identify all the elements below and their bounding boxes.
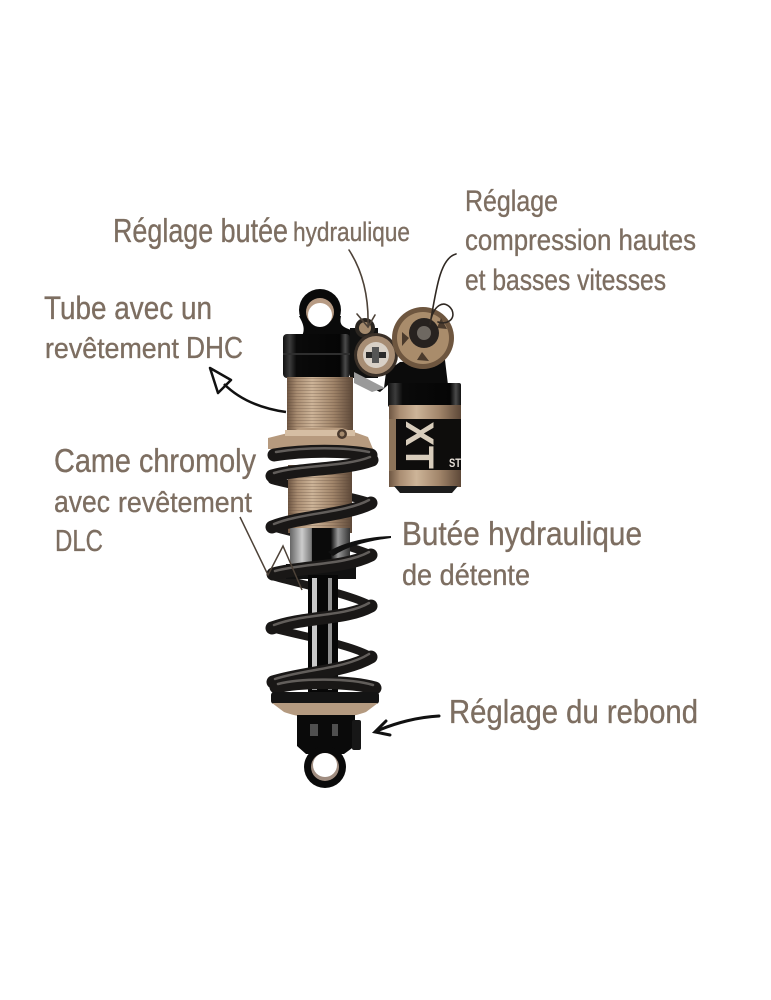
label: chromoly cam	[54, 442, 256, 558]
hose connector	[354, 360, 448, 392]
arrow: rebound adjust	[375, 716, 439, 735]
arrow: rebound bump stop	[328, 536, 391, 556]
label: chromoly cam: avec	[54, 484, 110, 519]
label: rebound bump stop	[402, 515, 642, 592]
top eyelet	[299, 289, 356, 345]
arrow: chromoly cam	[240, 517, 302, 590]
reservoir	[388, 383, 462, 493]
arrow: hydraulic bump stop adjust	[349, 250, 375, 327]
bronze threaded tube	[287, 377, 353, 533]
shaft	[308, 575, 338, 697]
bottom eyelet and rebound knob	[297, 715, 361, 788]
front spring coils	[272, 448, 375, 688]
label: DHC tube: DHC	[186, 330, 243, 365]
label: rebound bump stop: Butée hydraulique	[402, 515, 642, 552]
bottom spring plate	[271, 692, 379, 718]
label: rebound bump stop: de détente	[402, 559, 530, 592]
compression knob	[392, 307, 454, 369]
collar	[268, 428, 373, 449]
label: DHC tube: Tube avec un	[44, 290, 212, 326]
label: compression adjust	[465, 185, 696, 297]
label: DHC tube: revêtement	[45, 333, 179, 365]
label: bump stop adjust: hydraulique	[293, 217, 410, 247]
label: chromoly cam: Came chromoly	[54, 442, 256, 479]
reservoir logo: XT	[397, 421, 441, 469]
large hydraulic knob	[354, 333, 398, 377]
arrow: DHC tube	[210, 368, 286, 412]
arrow: compression adjust	[430, 254, 456, 325]
label: bump stop adjust: Réglage butée	[113, 212, 288, 249]
lower silver bump stop	[286, 528, 356, 579]
label: DHC tube	[44, 290, 243, 365]
label: rebound adjust: Réglage du rebond	[449, 693, 698, 730]
label: compression adjust: compression hautes	[465, 224, 696, 257]
main cylinder upper black cap	[283, 328, 378, 378]
label: chromoly cam: DLC	[55, 523, 103, 558]
reservoir small mark: ST	[449, 456, 462, 470]
shock absorber	[268, 289, 462, 788]
small bump stop knob	[355, 318, 375, 338]
label: chromoly cam: revêtement	[118, 487, 252, 519]
rear spring coils	[272, 480, 372, 657]
label: compression adjust: Réglage	[465, 185, 558, 218]
label: compression adjust: et basses vitesses	[465, 264, 666, 297]
